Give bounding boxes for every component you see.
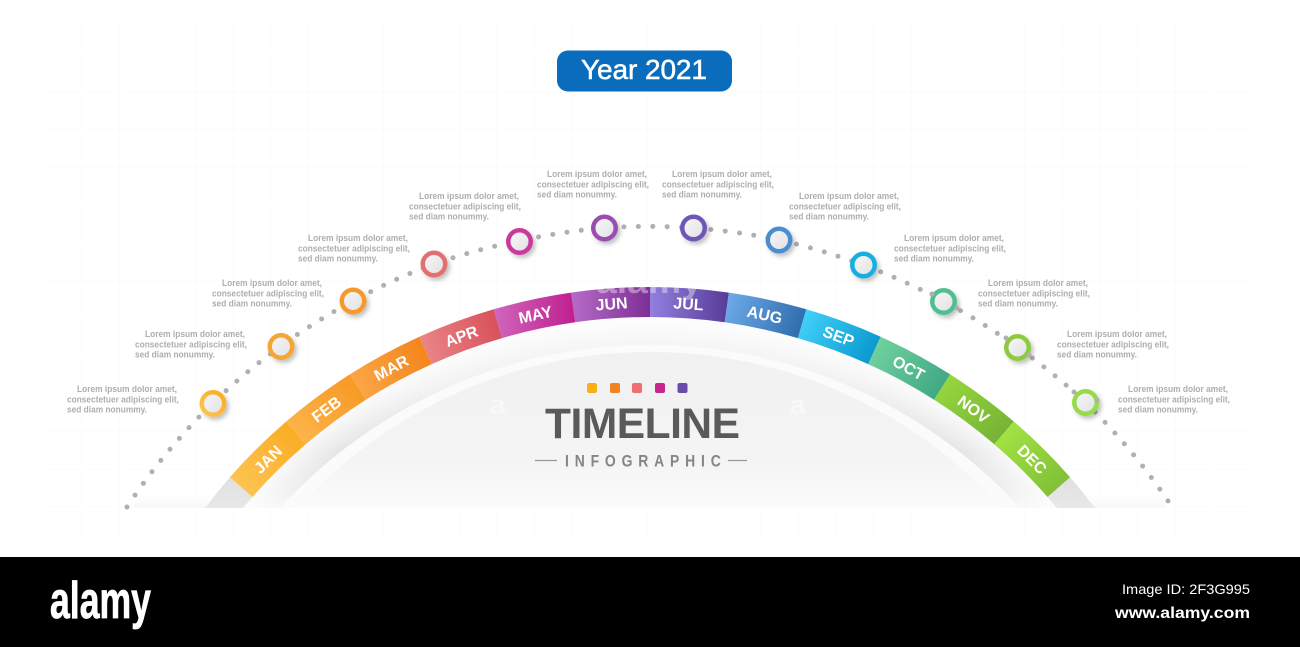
marker: JUN — [591, 214, 618, 242]
text block: MAY: consectetuer adipiscing elit, — [409, 201, 521, 211]
marker: MAY — [506, 228, 533, 255]
text block: SEP — [894, 233, 1006, 264]
text block: APR: consectetuer adipiscing elit, — [298, 243, 410, 253]
color squares — [587, 383, 688, 393]
text block: FEB — [135, 329, 247, 360]
month labels: DEC — [1013, 442, 1050, 478]
arc end caps — [205, 477, 1095, 508]
text block: AUG: Lorem ipsum dolor amet, — [799, 191, 899, 201]
central dome — [243, 317, 1057, 508]
text block: JAN — [67, 384, 179, 415]
text block: NOV: Lorem ipsum dolor amet, — [1067, 329, 1167, 339]
month labels — [251, 295, 1050, 478]
dotted arc — [127, 226, 1168, 507]
segment: OCT — [868, 337, 950, 400]
segment: FEB — [286, 374, 366, 444]
text block: MAR: Lorem ipsum dolor amet, — [222, 278, 322, 288]
month labels: OCT — [889, 353, 927, 384]
text block: FEB: consectetuer adipiscing elit, — [135, 339, 247, 349]
text block: OCT: sed diam nonummy. — [978, 299, 1058, 309]
text block: MAR — [212, 278, 324, 309]
text block: OCT: Lorem ipsum dolor amet, — [988, 278, 1088, 288]
text block: SEP: Lorem ipsum dolor amet, — [904, 233, 1004, 243]
marker: APR — [420, 250, 448, 278]
marker: FEB — [268, 333, 294, 360]
segment: DEC — [994, 422, 1070, 497]
marker: DEC — [1072, 389, 1100, 416]
text block: MAR: consectetuer adipiscing elit, — [212, 288, 324, 298]
month labels: NOV — [954, 393, 992, 427]
text block: JUN: Lorem ipsum dolor amet, — [547, 169, 647, 179]
watermark — [490, 263, 806, 420]
marker: JUL — [680, 214, 707, 242]
marker: AUG — [766, 226, 792, 254]
text block: NOV: sed diam nonummy. — [1057, 350, 1137, 360]
title: TIMELINE — [545, 401, 740, 448]
text block: AUG: consectetuer adipiscing elit, — [789, 201, 901, 211]
text block: FEB: sed diam nonummy. — [135, 350, 215, 360]
month labels: MAY — [517, 304, 554, 328]
text block: JUL — [662, 169, 774, 200]
subtitle: INFOGRAPHIC — [565, 452, 721, 471]
text block: AUG — [789, 191, 901, 222]
marker: MAR — [340, 288, 366, 314]
text block: DEC — [1118, 384, 1230, 415]
month labels: JAN — [251, 443, 286, 477]
segment: JUN — [571, 287, 650, 322]
watermark: alamy — [596, 263, 702, 301]
text block: FEB: Lorem ipsum dolor amet, — [145, 329, 245, 339]
marker: NOV — [1004, 334, 1032, 361]
month labels: APR — [443, 323, 481, 351]
marker: JAN — [200, 390, 226, 417]
text block: MAY — [409, 191, 521, 222]
text block: SEP: consectetuer adipiscing elit, — [894, 243, 1006, 253]
text block: JUN: consectetuer adipiscing elit, — [537, 179, 649, 189]
month labels: AUG — [745, 304, 784, 328]
footer logo: alamy — [50, 572, 151, 630]
image id: Image ID: 2F3G995 — [1122, 581, 1250, 597]
text block: MAY: Lorem ipsum dolor amet, — [419, 191, 519, 201]
text block: OCT: consectetuer adipiscing elit, — [978, 288, 1090, 298]
segment: SEP — [798, 309, 881, 364]
text block: JUN: sed diam nonummy. — [537, 190, 617, 200]
text block: MAY: sed diam nonummy. — [409, 212, 489, 222]
marker: SEP — [850, 252, 877, 278]
footer bar — [0, 557, 1300, 647]
website: www.alamy.com — [1114, 605, 1250, 622]
text block: DEC: Lorem ipsum dolor amet, — [1128, 384, 1228, 394]
month labels: SEP — [820, 324, 856, 351]
text block: AUG: sed diam nonummy. — [789, 212, 869, 222]
text block: JUN — [537, 169, 649, 200]
header badge: Year 2021: Year 2021 — [581, 54, 707, 85]
text block: JUL: consectetuer adipiscing elit, — [662, 179, 774, 189]
text block: JAN: consectetuer adipiscing elit, — [67, 394, 179, 404]
text block: DEC: consectetuer adipiscing elit, — [1118, 394, 1230, 404]
header badge: Year 2021 — [557, 50, 732, 92]
text block: APR: Lorem ipsum dolor amet, — [308, 233, 408, 243]
watermark: a — [790, 389, 806, 420]
month labels: FEB — [309, 394, 345, 426]
text block: APR: sed diam nonummy. — [298, 254, 378, 264]
watermark: a — [490, 389, 506, 420]
segment: JAN — [230, 422, 306, 497]
text block: JAN: Lorem ipsum dolor amet, — [77, 384, 177, 394]
marker: OCT — [930, 288, 960, 315]
month labels: JUN — [595, 295, 628, 314]
text block: DEC: sed diam nonummy. — [1118, 405, 1198, 415]
segment: AUG — [725, 293, 806, 338]
segment: APR — [419, 309, 502, 364]
text block: SEP: sed diam nonummy. — [894, 254, 974, 264]
text block: MAR: sed diam nonummy. — [212, 299, 292, 309]
segment: NOV — [934, 374, 1014, 444]
text block: NOV: consectetuer adipiscing elit, — [1057, 339, 1169, 349]
segment: JUL — [650, 287, 729, 322]
month labels: MAR — [372, 353, 412, 385]
segment: MAR — [350, 337, 432, 400]
text block: NOV — [1057, 329, 1169, 360]
segment: MAY — [494, 293, 575, 338]
text block: JUL: Lorem ipsum dolor amet, — [672, 169, 772, 179]
text block: APR — [298, 233, 410, 264]
text block: OCT — [978, 278, 1090, 309]
month band — [230, 287, 1070, 497]
month labels: JUL — [673, 295, 704, 314]
text block: JUL: sed diam nonummy. — [662, 190, 742, 200]
text block: JAN: sed diam nonummy. — [67, 405, 147, 415]
